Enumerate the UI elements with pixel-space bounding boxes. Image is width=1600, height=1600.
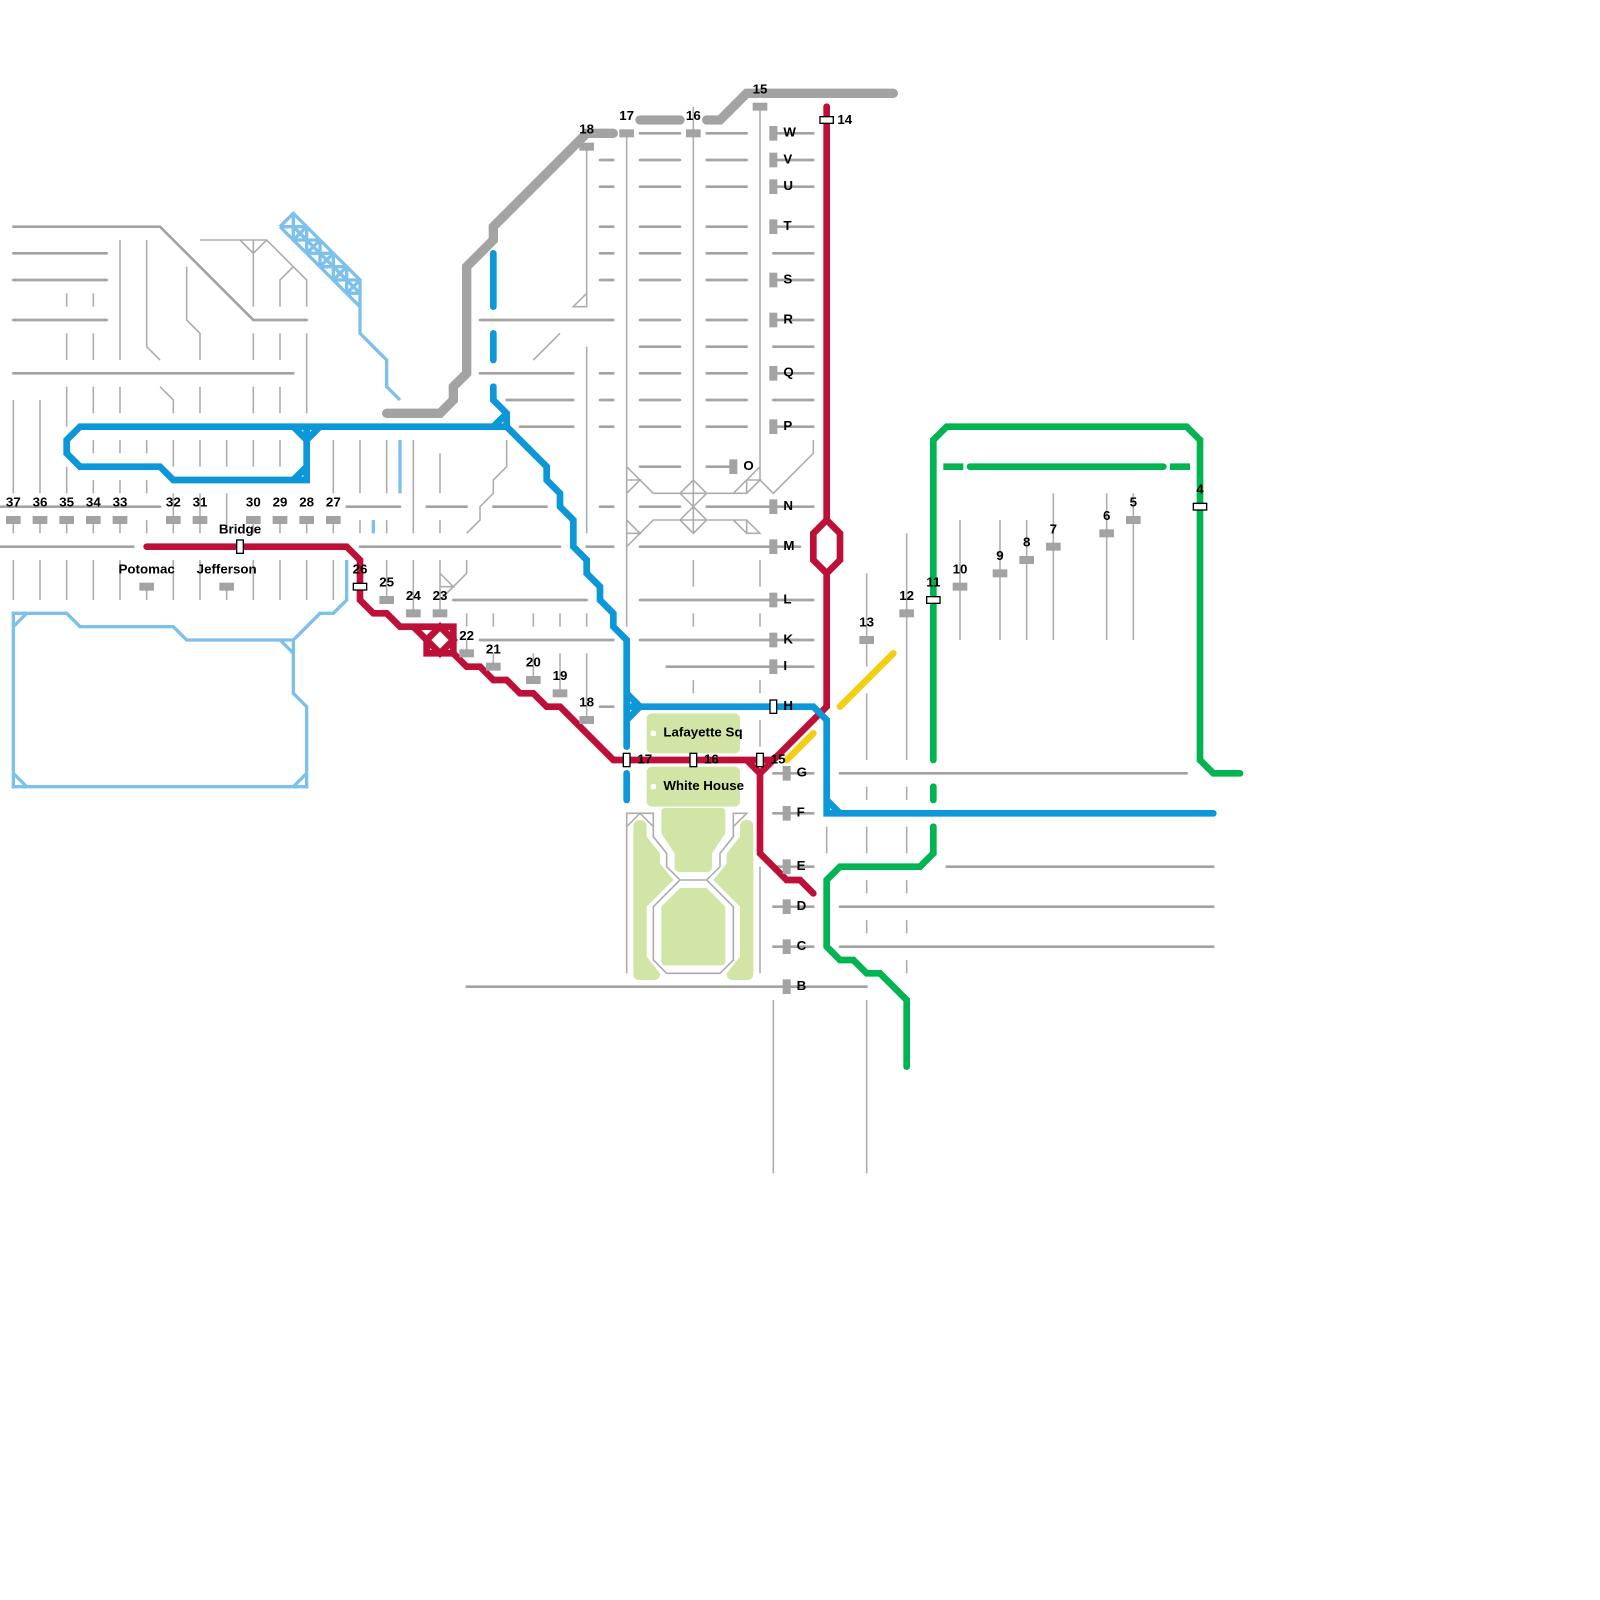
street number labels: eastern row: 6 <box>1103 508 1110 523</box>
station number 14: 14 <box>837 112 853 127</box>
street number labels: eastern row <box>859 481 1204 630</box>
street number labels: western row: 25 <box>379 575 395 590</box>
named avenue labels: Potomac <box>119 561 175 576</box>
street letter labels: Q <box>783 365 794 380</box>
street letter labels: B <box>797 978 807 993</box>
street number labels: red line stops: 17 <box>637 751 652 766</box>
street letter labels: I <box>783 658 787 673</box>
street number labels: red line stops: 16 <box>704 751 719 766</box>
street letter labels <box>743 125 807 993</box>
street number labels: northern row <box>579 81 768 136</box>
street number labels: eastern row: 4 <box>1196 481 1204 496</box>
park labels: Lafayette Sq <box>663 725 743 740</box>
park labels <box>663 725 744 793</box>
street number labels: western row: 22 <box>459 628 474 643</box>
street number labels: western row <box>6 495 594 710</box>
street number labels: northern row: 15 <box>753 81 768 96</box>
street number labels: western row: 20 <box>526 655 541 670</box>
street number labels: northern row: 16 <box>686 108 701 123</box>
street number labels: eastern row: 12 <box>899 588 914 603</box>
street letter labels: D <box>797 898 807 913</box>
named avenue labels <box>119 521 261 576</box>
light blue line: lower loop <box>13 560 347 787</box>
minor street grid: thin vertical lines <box>13 107 1133 1173</box>
street number labels: western row: 35 <box>59 495 75 510</box>
park labels: White House <box>663 778 744 793</box>
street number labels: eastern row: 7 <box>1050 521 1057 536</box>
street number labels: western row: 19 <box>553 668 567 683</box>
street number labels: red line stops: 15 <box>771 751 786 766</box>
street number labels: western row: 32 <box>166 495 181 510</box>
street number labels: western row: 18 <box>579 695 594 710</box>
street number labels: eastern row: 10 <box>953 561 967 576</box>
street number labels: western row: 21 <box>486 641 501 656</box>
park: Lafayette Square <box>647 713 740 753</box>
street letter labels: V <box>783 151 792 166</box>
street number labels: eastern row: 11 <box>926 575 941 590</box>
street letter labels: M <box>783 538 794 553</box>
street letter labels: O <box>743 458 754 473</box>
park: the Ellipse and National Mall lawns <box>633 808 753 980</box>
street number labels: western row: 30 <box>246 495 261 510</box>
street letter labels: C <box>797 938 807 953</box>
named avenue labels: Bridge <box>219 521 261 536</box>
street number labels: eastern row: 13 <box>859 615 874 630</box>
thick gray line: upper route <box>387 93 893 413</box>
street letter labels: S <box>783 271 792 286</box>
green line <box>827 427 1240 1067</box>
street letter labels: W <box>783 125 796 140</box>
street number labels: western row: 34 <box>86 495 101 510</box>
street letter labels: G <box>797 765 807 780</box>
street letter labels: F <box>797 805 805 820</box>
street number labels: western row: 24 <box>406 588 421 603</box>
street number labels: western row: 26 <box>353 561 367 576</box>
stations: numbered street stops <box>6 103 1141 724</box>
street letter labels: E <box>797 858 806 873</box>
street number labels: western row: 37 <box>6 495 21 510</box>
blue line <box>67 253 1213 813</box>
street letter labels: H <box>783 698 793 713</box>
street number labels: eastern row: 8 <box>1023 535 1030 550</box>
street number labels: northern row: 18 <box>579 121 594 136</box>
street number labels: red line stops <box>637 751 786 766</box>
stations: letter street stops <box>729 126 791 994</box>
street letter labels: K <box>783 631 793 646</box>
light blue line: upper branch and truss bridge <box>280 213 400 400</box>
street letter labels: P <box>783 418 792 433</box>
street number labels: western row: 31 <box>193 495 208 510</box>
named avenue labels: Jefferson <box>197 561 257 576</box>
street number labels: eastern row: 9 <box>996 548 1004 563</box>
park: White House grounds <box>647 767 740 807</box>
street number labels: western row: 28 <box>299 495 314 510</box>
street number labels: northern row: 17 <box>619 108 634 123</box>
park markers <box>650 730 656 790</box>
street number labels: western row: 23 <box>433 588 447 603</box>
major street grid: horizontal streets <box>0 133 1213 987</box>
street number labels: eastern row: 5 <box>1130 495 1138 510</box>
red line <box>147 107 840 893</box>
street number labels: western row: 29 <box>273 495 287 510</box>
park footpaths <box>627 813 747 973</box>
street number labels: western row: 36 <box>33 495 47 510</box>
street letter labels: L <box>783 591 791 606</box>
street letter labels: T <box>783 218 791 233</box>
yellow line <box>787 653 893 760</box>
light blue line: short segments <box>373 440 400 533</box>
interchange markers: white stations <box>237 117 1207 767</box>
street number labels: western row: 33 <box>113 495 127 510</box>
street letter labels: R <box>783 311 793 326</box>
street letter labels: N <box>783 498 793 513</box>
street number labels: western row: 27 <box>326 495 341 510</box>
street letter labels: U <box>783 178 793 193</box>
